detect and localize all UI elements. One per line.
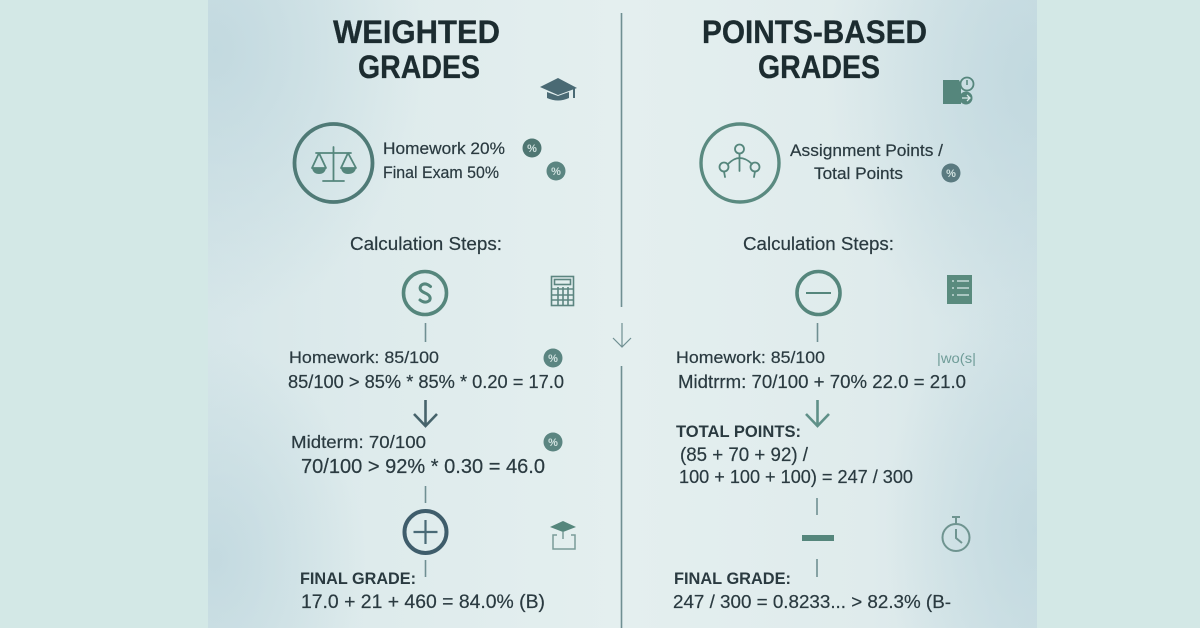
connector line — [424, 323, 426, 342]
formula text — [790, 142, 943, 183]
icon: percent badge — [544, 432, 562, 452]
final grade: 17.0 + 21 + 460 = 84.0% (B) — [301, 591, 545, 613]
formula text: Total Points — [814, 165, 903, 183]
panel: points-based grades — [673, 14, 976, 612]
icon: balance scale — [294, 124, 372, 202]
step: homework and midterm — [676, 348, 966, 392]
step: homework: 85/100 > 85% * 85% * 0.20 = 17.0 — [288, 371, 564, 392]
weights list — [383, 139, 505, 182]
icon: percent badge: % — [551, 166, 561, 178]
formula text: Assignment Points / — [790, 142, 943, 160]
title: points-based grades: POINTS-BASED — [702, 14, 927, 50]
connector line — [424, 486, 426, 503]
icon: graduation cap — [540, 78, 577, 100]
icon: percent badge — [942, 164, 960, 182]
step: homework — [288, 348, 564, 392]
icon: calculator — [552, 276, 574, 306]
title: weighted grades: WEIGHTED — [333, 14, 500, 50]
garbled label: |wo(s| — [937, 350, 976, 366]
final grade — [673, 569, 951, 612]
step: midterm — [291, 432, 545, 478]
icon: stopwatch — [942, 517, 970, 551]
weights list: Homework 20% — [383, 139, 505, 158]
connector line — [424, 560, 426, 577]
step: midterm: 70/100 > 92% * 0.30 = 46.0 — [301, 456, 545, 478]
panel: weighted grades — [288, 14, 577, 613]
heading: calculation steps: Calculation Steps: — [350, 233, 502, 254]
center divider with arrow — [613, 13, 631, 628]
arrow — [806, 400, 829, 426]
icon: branching nodes — [701, 124, 779, 202]
heading: calculation steps: Calculation Steps: — [743, 233, 894, 254]
final grade: 247 / 300 = 0.8233... > 82.3% (B- — [673, 591, 951, 612]
title: points-based grades: GRADES — [758, 49, 880, 85]
connector line — [816, 323, 818, 342]
arrow — [414, 400, 437, 426]
final grade — [300, 569, 545, 613]
icon: checklist — [947, 275, 972, 304]
step: homework and midterm: Midtrrm: 70/100 + 70% 22.0 = 21.0 — [678, 371, 966, 392]
title: weighted grades: GRADES — [358, 49, 480, 85]
icon: minus circle — [797, 272, 840, 314]
step: midterm: Midterm: 70/100 — [291, 432, 426, 452]
step: total points: TOTAL POINTS: — [676, 422, 801, 441]
icon: percent badge: % — [548, 353, 558, 365]
minus bar — [802, 535, 834, 541]
title: weighted grades — [333, 14, 500, 85]
icon: percent badge — [522, 138, 542, 158]
icon: percent badge: % — [527, 143, 537, 155]
connector line — [816, 559, 818, 577]
icon: book and clocks — [943, 78, 974, 104]
icon: percent badge — [546, 162, 566, 180]
icon: plus circle — [404, 511, 446, 553]
final grade: FINAL GRADE: — [674, 569, 791, 588]
icon: cap on box — [550, 521, 576, 549]
step: total points — [676, 422, 913, 487]
icon: percent badge: % — [548, 437, 558, 449]
connector line — [816, 498, 818, 515]
step: homework: Homework: 85/100 — [289, 348, 439, 367]
step: total points: (85 + 70 + 92) / — [680, 445, 809, 466]
final grade: FINAL GRADE: — [300, 569, 416, 588]
step: homework and midterm: Homework: 85/100 — [676, 348, 825, 367]
icon: dollar circle — [404, 272, 446, 314]
weights list: Final Exam 50% — [383, 163, 499, 182]
background panel — [208, 0, 1037, 628]
icon: percent badge: % — [946, 168, 956, 180]
step: total points: 100 + 100 + 100) = 247 / 300 — [679, 466, 913, 487]
title: points-based grades — [702, 14, 927, 85]
icon: percent badge — [544, 348, 562, 368]
